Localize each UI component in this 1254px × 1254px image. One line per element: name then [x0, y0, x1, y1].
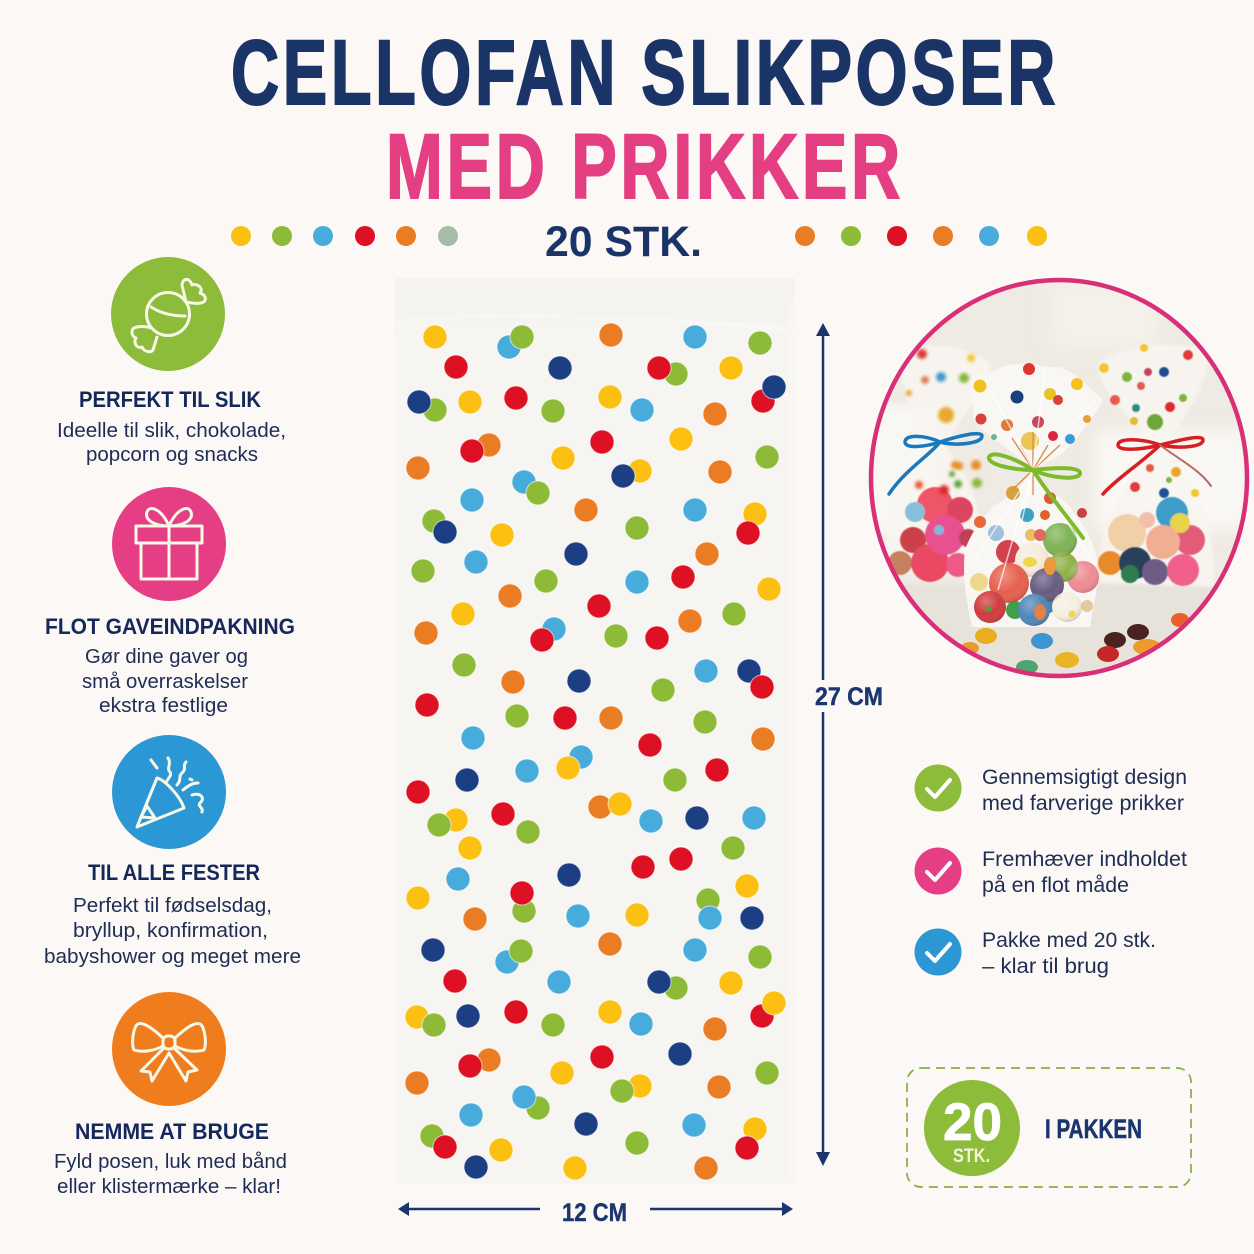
feature: nemme at bruge — [54, 992, 287, 1198]
panel: pack count badge — [907, 1068, 1191, 1187]
check item: transparent design: Gennemsigtigt design — [982, 766, 1187, 789]
blue ribbon — [889, 434, 982, 494]
panel: benefits checklist — [914, 764, 1187, 978]
left bag — [886, 346, 992, 582]
heading: TIL ALLE FESTER — [88, 860, 260, 885]
check item: highlights contents: Fremhæver indholdet — [982, 848, 1187, 871]
subtitle: 20 stk: 20 STK. — [545, 218, 702, 266]
label: 27 cm: 27 CM — [815, 683, 883, 711]
icon: candy — [111, 257, 225, 371]
description: små overraskelser — [82, 670, 248, 693]
check item: transparent design: med farverige prikker — [982, 792, 1184, 815]
description — [57, 419, 286, 466]
feature: flot gaveindpakning — [45, 487, 295, 717]
check item: highlights contents: på en flot måde — [982, 874, 1129, 897]
decorative dots left of subtitle — [231, 226, 458, 246]
label: i pakken: I PAKKEN — [1045, 1114, 1142, 1144]
description: ekstra festlige — [99, 694, 228, 717]
feature: til alle fester — [44, 735, 301, 968]
check item: pack of 20: – klar til brug — [982, 955, 1109, 978]
loose candies — [961, 613, 1189, 674]
arrow: height dimension — [815, 323, 883, 1166]
heading: FLOT GAVEINDPAKNING — [45, 614, 295, 639]
description: eller klistermærke – klar! — [57, 1175, 281, 1198]
description: popcorn og snacks — [86, 443, 258, 466]
badge: 20 stk: STK. — [953, 1146, 990, 1167]
badge: 20 stk — [924, 1080, 1020, 1176]
icon: gift — [112, 487, 226, 601]
candy highlights — [974, 523, 1099, 626]
decorative dots right of subtitle — [795, 226, 1047, 246]
feature: perfekt til slik — [57, 257, 286, 466]
check item: pack of 20: Pakke med 20 stk. — [982, 929, 1156, 952]
panel: cellophane bag with dots — [395, 278, 795, 1184]
description — [82, 645, 248, 717]
description: Gør dine gaver og — [85, 645, 248, 668]
title — [231, 22, 1059, 218]
check item: pack of 20 — [914, 928, 1156, 978]
description: bryllup, konfirmation, — [73, 919, 268, 942]
description — [44, 894, 301, 968]
panel: left feature list — [44, 257, 301, 1198]
description: Fyld posen, luk med bånd — [54, 1150, 287, 1173]
front bag — [964, 363, 1103, 627]
icon: party popper — [112, 735, 226, 849]
photo ring — [871, 280, 1247, 676]
check item: highlights contents — [914, 848, 1187, 897]
label: 12 cm: 12 CM — [562, 1199, 627, 1227]
heading: PERFEKT TIL SLIK — [79, 387, 261, 412]
photo: candy bags with ribbons — [860, 270, 1254, 694]
description — [54, 1150, 287, 1198]
title: MED PRIKKER — [386, 116, 904, 218]
right bag — [1097, 344, 1214, 587]
badge: 20 stk: 20 — [943, 1093, 1002, 1152]
description: Ideelle til slik, chokolade, — [57, 419, 286, 442]
arrow: width dimension — [398, 1199, 793, 1227]
red ribbon — [1103, 437, 1211, 494]
description: babyshower og meget mere — [44, 945, 301, 968]
check item: transparent design — [914, 764, 1187, 815]
heading: NEMME AT BRUGE — [75, 1119, 269, 1144]
description: Perfekt til fødselsdag, — [73, 894, 272, 917]
icon: bow — [112, 992, 226, 1106]
polka dots — [405, 323, 786, 1180]
green ribbon — [989, 454, 1083, 538]
